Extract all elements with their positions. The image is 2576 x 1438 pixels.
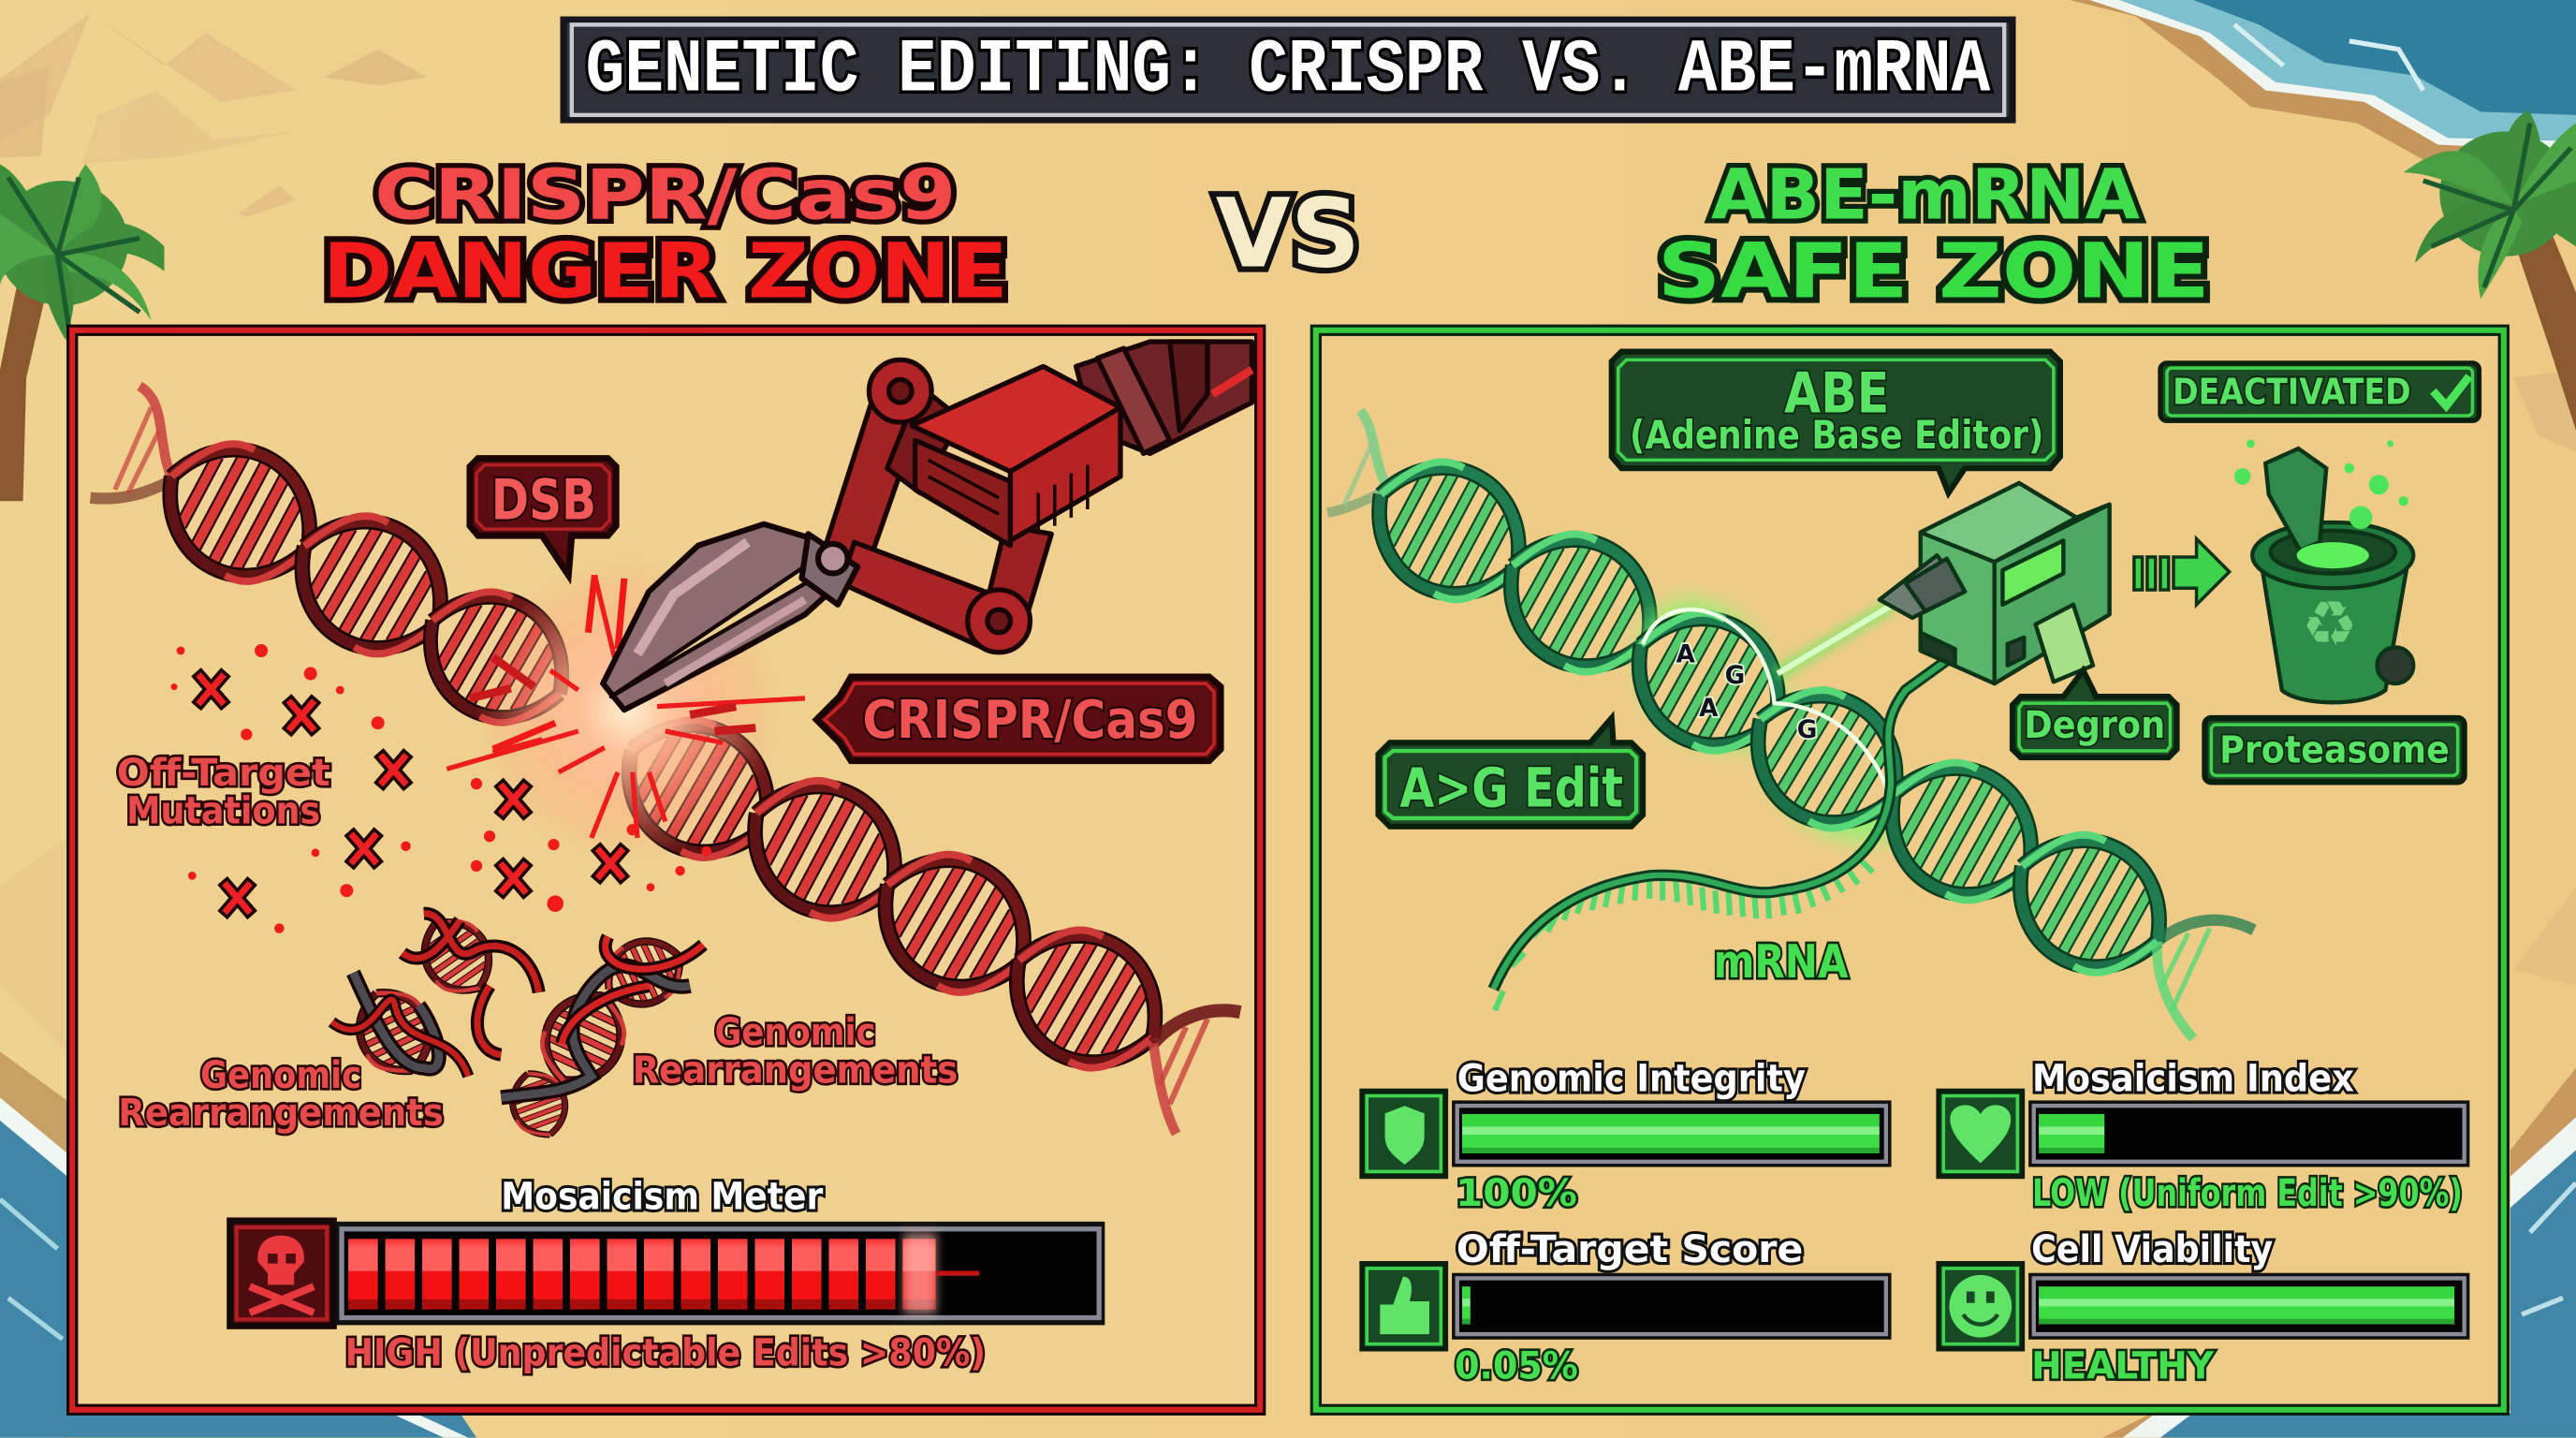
heading: CRISPR danger zone: DANGER ZONE: [323, 228, 1008, 316]
label: off-target mutations: [117, 751, 330, 832]
stat: genomic integrity: Genomic Integrity: [1457, 1056, 1806, 1100]
icon: shield: [1383, 1104, 1426, 1167]
heading: ABE-mRNA safe zone: ABE-mRNA: [1711, 155, 2140, 235]
stat: off-target score: Off-Target Score: [1456, 1227, 1803, 1271]
robotic arm: [822, 342, 1251, 653]
icon: heart: [1950, 1105, 2011, 1164]
heading: CRISPR danger zone: CRISPR/Cas9: [374, 155, 956, 235]
mosaicism meter: [230, 1175, 1103, 1374]
meter reading: HIGH (Unpredictable Edits >80%): [345, 1330, 986, 1374]
DNA helix upper left: [91, 386, 590, 745]
callout: ABE: (Adenine Base Editor): [1630, 412, 2043, 458]
label: degron: Degron: [2024, 703, 2165, 747]
label: genomic rearrangements right: [633, 1010, 958, 1093]
label: proteasome: [2204, 718, 2465, 782]
icon: skull and crossbones: [230, 1221, 333, 1326]
panel: ABE-mRNA safe zone: [1316, 330, 2504, 1410]
off-target X marks: [200, 677, 621, 910]
meter title: Mosaicism Meter: [501, 1175, 823, 1219]
DNA helix: [1327, 411, 2254, 1038]
label: genomic rearrangements left: [118, 1053, 444, 1135]
stat: genomic integrity: [1362, 1056, 1889, 1215]
heading: CRISPR danger zone: [323, 155, 1008, 316]
label: off-target mutations: Mutations: [126, 788, 320, 832]
ABE editor device: [1880, 483, 2110, 683]
icon: check mark: [2433, 376, 2469, 405]
heading: ABE-mRNA safe zone: [1658, 155, 2210, 316]
label: genomic rearrangements left: Genomic: [200, 1053, 361, 1097]
palm tree left: [0, 165, 165, 501]
label: off-target mutations: Off-Target: [117, 751, 330, 795]
laser beam: [1778, 605, 1893, 674]
base letters: G: [1725, 662, 1745, 690]
meter bar: [339, 1224, 1103, 1323]
label: genomic rearrangements right: Rearrangements: [633, 1049, 958, 1093]
label: mRNA: mRNA: [1714, 934, 1848, 989]
label: degron: [2012, 670, 2177, 757]
panel: CRISPR danger zone: [72, 330, 1260, 1410]
DNA helix lower right: [600, 696, 1240, 1134]
icon: smiley: [1949, 1275, 2012, 1338]
label: proteasome: Proteasome: [2219, 727, 2450, 771]
callout: DSB: [470, 459, 616, 575]
base letters: A: [1699, 695, 1719, 723]
arrow to proteasome: [2134, 539, 2230, 605]
base letters: A: [1676, 640, 1696, 668]
stat: cell viability: [1939, 1227, 2467, 1387]
label: A>G edit: [1379, 718, 1643, 827]
heading: ABE-mRNA safe zone: SAFE ZONE: [1658, 228, 2210, 316]
status badge: deactivated: DEACTIVATED: [2173, 372, 2411, 414]
stat: cell viability: Cell Viability: [2031, 1227, 2273, 1271]
trash bin proteasome: [2234, 439, 2413, 702]
sea bottom right: [2103, 1068, 2576, 1438]
sea bottom left: [0, 1051, 476, 1438]
rearranged DNA fragments: [332, 907, 703, 1144]
label: genomic rearrangements left: Rearrangements: [118, 1091, 444, 1135]
callout: ABE: [1612, 352, 2060, 493]
stat: off-target score: [1362, 1227, 1889, 1387]
trash bin proteasome: ♻: [2302, 588, 2358, 661]
callout: DSB: DSB: [491, 469, 596, 534]
stat: off-target score: 0.05%: [1455, 1343, 1578, 1387]
mRNA strand: [1493, 655, 1954, 1010]
callout: CRISPR/Cas9: CRISPR/Cas9: [862, 690, 1197, 751]
callout: CRISPR/Cas9: [816, 677, 1221, 761]
stat: genomic integrity: 100%: [1456, 1171, 1577, 1215]
stat: cell viability: HEALTHY: [2031, 1343, 2215, 1387]
status badge: deactivated: [2160, 363, 2479, 420]
stat: mosaicism index: LOW (Uniform Edit >90%): [2032, 1171, 2463, 1215]
cut explosion: [446, 559, 805, 861]
callout: ABE: ABE: [1784, 362, 1889, 427]
sea top right: [2070, 0, 2576, 181]
label: A>G edit: A>G Edit: [1399, 756, 1623, 820]
scatter particles: [171, 644, 711, 933]
stat: mosaicism index: [1939, 1056, 2467, 1215]
palm tree right: [2404, 110, 2576, 431]
stat: mosaicism index: Mosaicism Index: [2032, 1056, 2354, 1100]
label: genomic rearrangements right: Genomic: [714, 1010, 875, 1054]
base letters: G: [1797, 716, 1817, 744]
VS emblem: VS: [1216, 179, 1360, 289]
title banner: GENETIC EDITING: CRISPR VS. ABE-mRNA: [586, 29, 1991, 114]
icon: thumbs up: [1380, 1277, 1429, 1334]
scissors blades: [603, 524, 857, 710]
base letters: [1676, 640, 1817, 744]
